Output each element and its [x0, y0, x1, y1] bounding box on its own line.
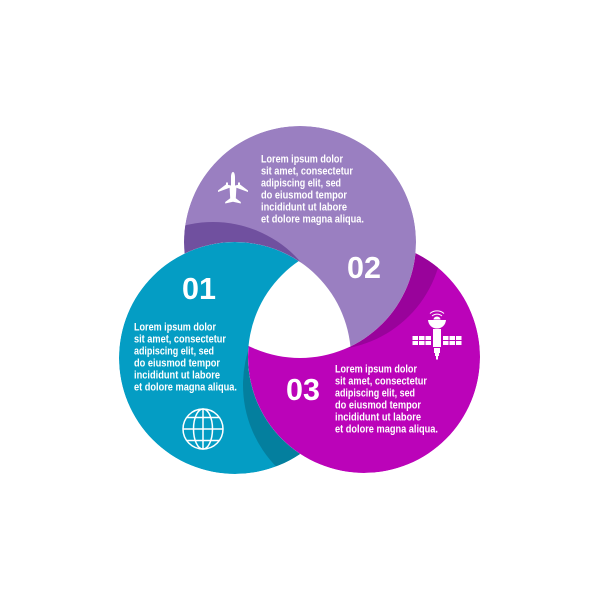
text block 01: do eiusmod tempor	[134, 358, 220, 370]
text block 02	[261, 154, 364, 226]
segment 01: teal ring	[119, 242, 300, 474]
text block 02: adipiscing elit, sed	[261, 178, 341, 190]
number 03: 03	[286, 373, 320, 407]
icon: globe	[183, 409, 223, 449]
segment 03: magenta ring	[248, 253, 480, 473]
text block 02: do eiusmod tempor	[261, 190, 347, 202]
text block 03: sit amet, consectetur	[335, 376, 427, 388]
text block 02: Lorem ipsum dolor	[261, 154, 343, 166]
text block 03	[335, 364, 438, 436]
segment 02: purple ring	[184, 126, 416, 346]
text block 01: adipiscing elit, sed	[134, 346, 214, 358]
text block 01: sit amet, consectetur	[134, 334, 226, 346]
text block 01: et dolore magna aliqua.	[134, 382, 237, 394]
icon: satellite	[412, 311, 462, 360]
text block 03: Lorem ipsum dolor	[335, 364, 417, 376]
text block 03: do eiusmod tempor	[335, 400, 421, 412]
number 02: 02	[347, 251, 381, 285]
number 01: 01	[182, 272, 216, 306]
icon: airplane	[218, 172, 248, 204]
text block 03: incididunt ut labore	[335, 412, 421, 424]
text block 01	[134, 322, 237, 394]
text block 02: sit amet, consectetur	[261, 166, 353, 178]
text block 02: incididunt ut labore	[261, 202, 347, 214]
text block 02: et dolore magna aliqua.	[261, 214, 364, 226]
text block 03: adipiscing elit, sed	[335, 388, 415, 400]
text block 01: Lorem ipsum dolor	[134, 322, 216, 334]
text block 03: et dolore magna aliqua.	[335, 424, 438, 436]
text block 01: incididunt ut labore	[134, 370, 220, 382]
